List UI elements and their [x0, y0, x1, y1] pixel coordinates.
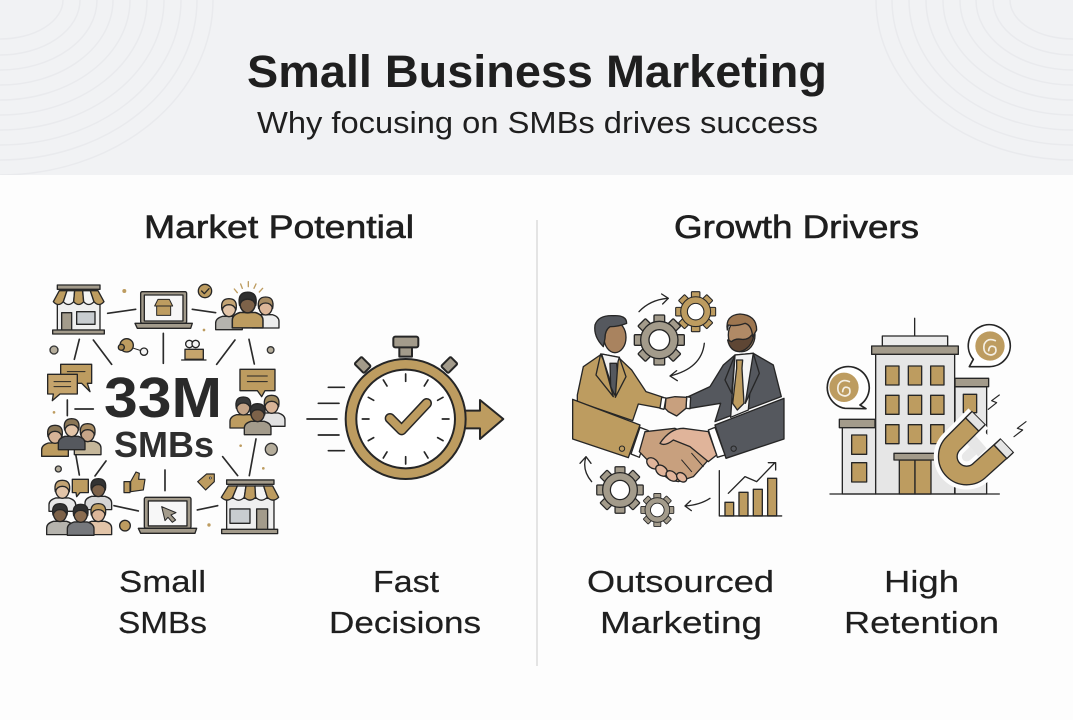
icon: laptop with store — [135, 292, 192, 328]
icon: people top right — [216, 282, 279, 330]
icon: tag — [198, 474, 214, 490]
speed lines — [307, 387, 344, 451]
icon: chat and people right — [230, 369, 285, 435]
label: Outsourced Marketing — [587, 564, 774, 640]
right speech bubble — [968, 325, 1010, 367]
icon: node connector — [118, 339, 148, 355]
icon: stopwatch — [307, 337, 503, 479]
left businessman — [577, 316, 663, 421]
small handshake — [660, 397, 691, 416]
heading: Growth Drivers: Growth Drivers — [674, 209, 919, 245]
icon: laptop with cursor — [138, 497, 197, 533]
icon: handshake illustration — [573, 292, 784, 526]
label: Small SMBs: SMBs — [118, 605, 207, 640]
crown — [393, 337, 418, 357]
magnet — [948, 418, 1007, 475]
icon: store top left — [53, 285, 104, 334]
label: Outsourced Marketing: Marketing — [600, 605, 762, 640]
icon: 33M SMBs network — [42, 282, 285, 535]
label: High Retention: Retention — [844, 605, 999, 640]
icon: people left — [42, 419, 101, 456]
33M figure: 33M — [104, 366, 222, 430]
icon: people bottom left — [47, 479, 112, 535]
header band — [0, 0, 1073, 175]
right businessman — [688, 314, 781, 422]
building — [830, 318, 999, 494]
icon: chat bubbles left — [48, 364, 92, 401]
bar chart — [719, 463, 782, 516]
label: Fast Decisions — [329, 564, 481, 640]
side buttons — [354, 357, 458, 373]
icon: building with magnet — [827, 318, 1026, 494]
right sleeve — [708, 398, 784, 458]
large hands — [639, 428, 717, 484]
label: High Retention — [844, 564, 999, 640]
icon: desk — [182, 340, 206, 360]
icon: check badge — [198, 284, 212, 298]
label: Small SMBs: Small — [119, 564, 206, 599]
icon: store bottom right — [221, 480, 279, 534]
left sleeve — [573, 399, 648, 458]
dial — [346, 359, 466, 479]
label: Outsourced Marketing: Outsourced — [587, 564, 774, 599]
divider — [536, 220, 538, 666]
subtitle: Why focusing on SMBs drives success — [257, 105, 818, 140]
gears — [597, 292, 716, 526]
label: High Retention: High — [884, 564, 959, 599]
icon: thumbs up — [124, 472, 145, 493]
label: Fast Decisions: Decisions — [329, 605, 481, 640]
arrow — [463, 400, 503, 439]
SMBs figure: SMBs — [114, 424, 214, 465]
check mark — [390, 403, 427, 430]
heading: Market Potential: Market Potential — [144, 209, 414, 245]
cycle arrows — [580, 294, 710, 511]
bolts — [988, 395, 1026, 437]
label: Fast Decisions: Fast — [373, 564, 439, 599]
left speech bubble — [827, 367, 869, 409]
title: Small Business Marketing — [247, 46, 827, 97]
label: Small SMBs — [118, 564, 207, 640]
